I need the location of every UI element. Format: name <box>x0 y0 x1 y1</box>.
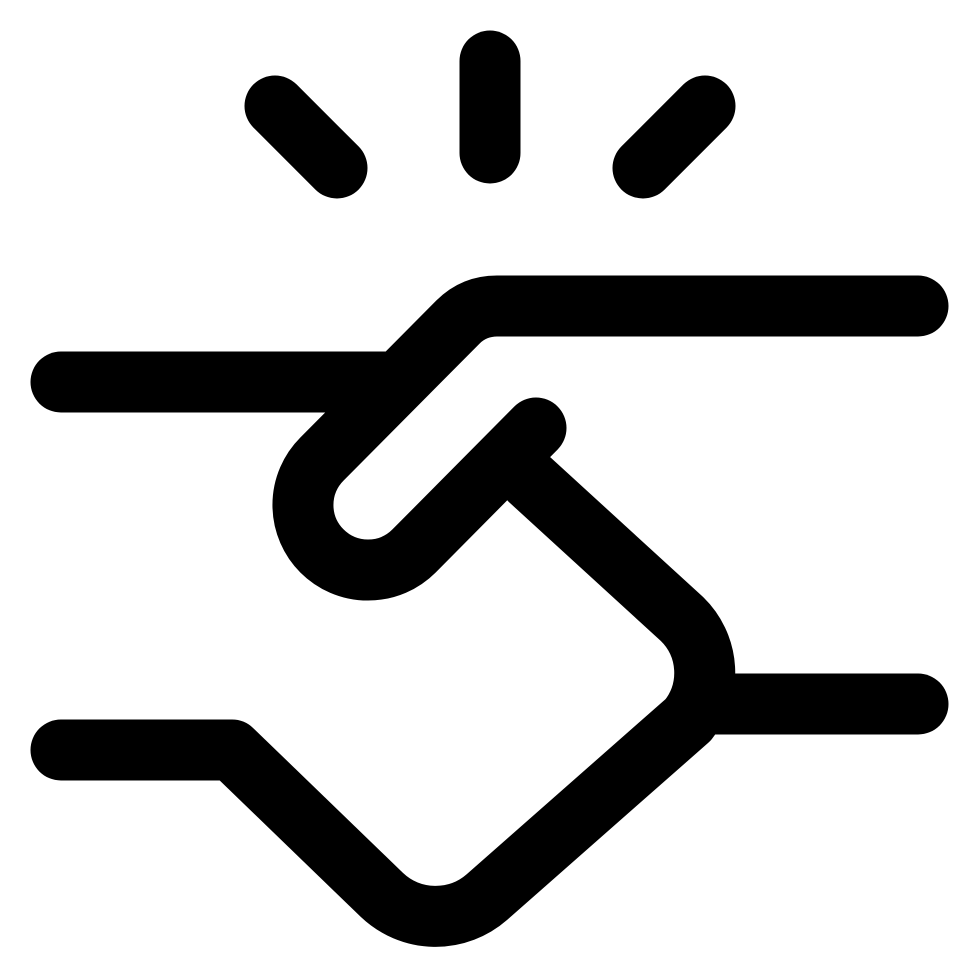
lower hand <box>61 480 918 916</box>
sparkle lines <box>275 61 705 168</box>
upper hand <box>61 306 918 570</box>
